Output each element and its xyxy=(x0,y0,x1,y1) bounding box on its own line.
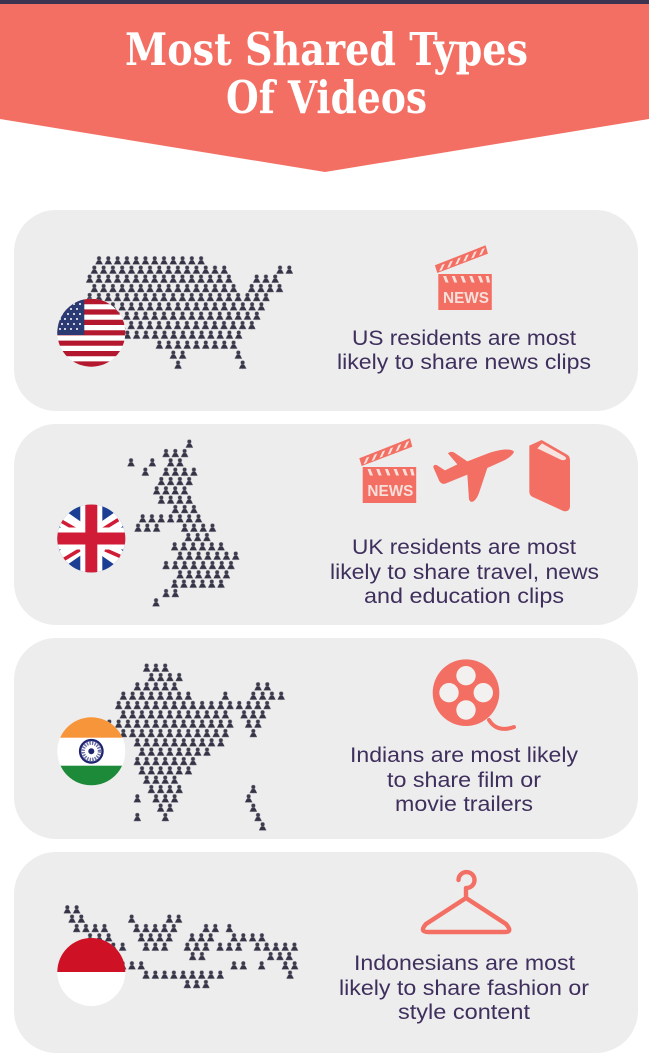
icon: clothes hanger xyxy=(423,872,509,932)
icon: film reel xyxy=(433,659,514,729)
text: US description xyxy=(337,327,591,374)
map: US people dots xyxy=(85,256,294,369)
icon: news clapperboard xyxy=(435,245,492,310)
map: UK people dots xyxy=(126,439,240,607)
text: India description: Indians are most likely xyxy=(350,744,579,767)
icon: airplane xyxy=(433,449,514,502)
icon: news clapperboard xyxy=(359,438,416,503)
title xyxy=(125,23,528,124)
title: Of Videos xyxy=(226,71,427,124)
map: India people dots xyxy=(105,663,286,831)
flag: USA xyxy=(57,298,127,368)
text: India description xyxy=(350,744,579,816)
text: Indonesia description: Indonesians are most xyxy=(354,952,575,975)
panel: Indonesia xyxy=(14,852,638,1053)
map: Indonesia people dots xyxy=(63,905,299,989)
text: Indonesia description xyxy=(339,952,589,1024)
header banner xyxy=(0,4,649,172)
panel: United States xyxy=(14,210,638,411)
text: India description: movie trailers xyxy=(395,793,533,816)
top dark bar xyxy=(0,0,649,4)
icon: news clapperboard: NEWS xyxy=(367,483,414,500)
text: UK description xyxy=(330,536,599,608)
flag: UK xyxy=(57,504,126,572)
title: Most Shared Types xyxy=(125,23,528,76)
icon: book xyxy=(529,440,570,511)
panel: United Kingdom xyxy=(14,424,638,625)
text: Indonesia description: style content xyxy=(398,1001,530,1024)
text: UK description: UK residents are most xyxy=(352,536,576,559)
panel: India xyxy=(14,638,638,839)
text: Indonesia description: likely to share fashion or xyxy=(339,977,589,1000)
text: India description: to share film or xyxy=(387,769,541,792)
icon: news clapperboard: NEWS xyxy=(443,290,489,307)
text: UK description: and education clips xyxy=(364,585,564,608)
flag: Indonesia xyxy=(57,937,127,1007)
text: UK description: likely to share travel, news xyxy=(330,561,599,584)
flag: India xyxy=(57,717,127,786)
text: US description: likely to share news clips xyxy=(337,351,591,374)
text: US description: US residents are most xyxy=(352,327,576,350)
